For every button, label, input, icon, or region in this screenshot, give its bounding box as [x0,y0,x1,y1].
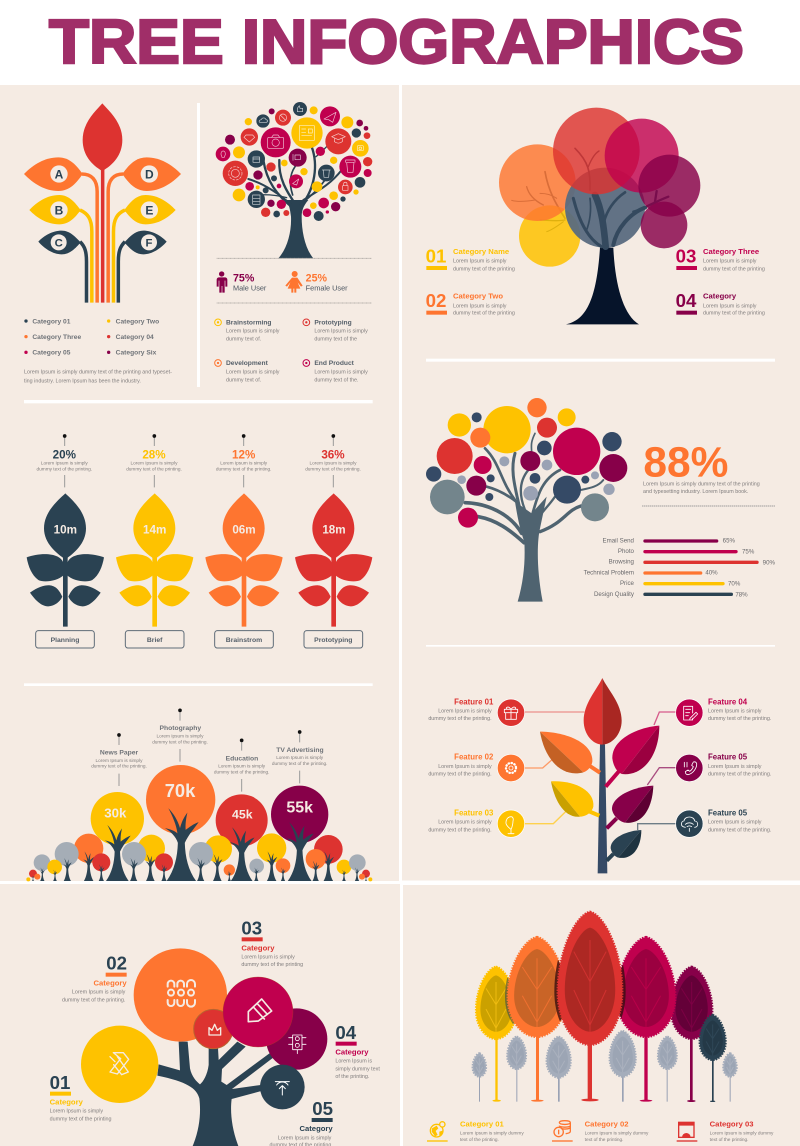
category 02: Category 02 [585,1119,629,1128]
legend: categories: Category Three [32,334,81,341]
icon: leaf D: D [145,167,154,181]
circle: red [553,108,640,194]
label 02: dummy text of the printing. [62,997,125,1003]
plant stem [598,744,607,873]
circle: red crown [194,1009,233,1049]
category 01: Lorem Ipsum is simply dummy [460,1130,524,1136]
leaf: dark [607,830,641,861]
label 03: 03 [241,918,262,939]
feature 03: dummy text of the printing. [428,827,492,833]
list item: brainstorming [215,319,280,343]
label 05 [269,1098,333,1146]
feature 04 [676,697,771,726]
panel: transparent circle tree [426,108,775,361]
chart: letter leaf stems [80,168,125,303]
plant: prototyping: dummy text of the printing. [305,467,361,473]
icon: leaf C: C [55,237,63,249]
list item: development: dummy text of. [226,377,261,383]
plant: prototyping [295,434,372,648]
legend: categories: Category Six [116,350,157,357]
plant: brainstrom: dummy text of the printing. [216,467,271,473]
tree circle: photography [146,765,215,881]
legend: categories: Category 01 [32,318,71,325]
feature 01: Lorem Ipsum is simply [438,709,492,715]
feature 02: dummy text of the printing. [428,772,492,778]
tree circle: tv advertising [271,786,328,881]
plant: planning: dummy text of the printing. [37,467,92,473]
icon: leaf B [29,195,81,224]
plant: brainstrom: 06m [232,523,256,536]
list item: development: Lorem Ipsum is simply [226,369,280,375]
plant: planning: Lorem Ipsum is simply [41,460,88,466]
legend: categories: Category 05 [32,350,71,357]
tree circle: education [216,794,268,881]
chart: bubble tree trunk [465,433,603,602]
small trees [26,833,372,881]
tree circle: tv advertising: 55k [286,800,313,817]
chart: left branches [512,172,565,232]
icon: male user [217,271,227,293]
label: category two [426,290,515,317]
plant: brainstrom: Lorem Ipsum is simply [220,460,268,466]
label: category two: Category Two [453,292,503,301]
list item: end product [303,360,368,383]
list item: development: Development [226,360,269,367]
label: category three: Lorem Ipsum is simply [703,259,757,265]
plant: planning [27,434,104,648]
circle: slate [565,168,645,248]
bar chart: Photo [618,548,635,555]
legend: categories [24,318,159,357]
icon: leaf D [122,157,181,191]
label: category three [676,245,765,272]
list item: end product: End Product [314,360,355,367]
feature 05 cloud [676,808,771,837]
label: category four: dummy text of the printing [703,311,765,317]
plant: prototyping: Lorem Ipsum is simply [310,460,357,466]
label 02: 02 [106,953,127,974]
label 05: Category [299,1124,333,1133]
panel: circle icon tree with numbered categories [50,918,380,1146]
connectors [525,712,676,830]
plant: brief [116,434,193,648]
plant: brainstrom: Brainstrom [226,637,262,644]
circle: yellow [519,205,580,267]
callout: tv advertising: dummy text of the printing. [272,761,327,767]
bar chart: 90% [763,559,776,566]
category 02: text of the printing. [585,1137,623,1143]
trunk [566,248,639,324]
plant: brief: Brief [147,637,163,644]
leaf tree: magenta [619,936,676,1038]
chart: center branches [573,148,668,247]
bar chart: 75% [742,548,755,555]
label 04 [335,1022,380,1080]
label: category name: dummy text of the printing [453,266,515,272]
stat: female user: Female User [306,283,348,292]
chart: bubble tree circles [426,398,627,528]
callout: photography: Lorem Ipsum is simply [157,733,204,739]
feature 03: Lorem Ipsum is simply [438,820,492,826]
label: category name: Category Name [453,247,509,256]
legend: categories: Category Two [116,318,159,325]
circle: magenta pencil [223,977,293,1047]
leaf tree: orange [506,936,562,1038]
callout: news paper: dummy text of the printing. [91,764,147,770]
callout: tv advertising [272,730,327,783]
circle: dark upload [260,1065,305,1109]
divider line [217,258,372,303]
plant: planning: Planning [51,637,79,644]
icon: leaf E [124,195,176,224]
leaf: plum [607,786,653,828]
leaf tree: dark [700,1015,726,1060]
leaf tree: red [558,912,622,1045]
callout: photography [152,708,208,762]
feature 02: Feature 02 [454,753,494,762]
icons: tree bubble glyphs [221,106,363,204]
feature 05 cloud: dummy text of the printing. [708,827,771,833]
bar chart: 65% [723,537,736,544]
tree circle: photography: 70k [165,780,196,801]
stat: female user [306,273,348,292]
icon: leaf C [38,231,81,254]
circle: magenta [605,119,679,193]
feature 05 phone: Feature 05 [708,753,748,762]
bar chart: 78% [735,591,748,598]
feature 02: Lorem Ipsum is simply [438,764,492,770]
callout: education [214,738,269,792]
category 03 [677,1119,774,1143]
plant: brief: Lorem Ipsum is simply [131,460,178,466]
list item: development [215,360,280,383]
label 04: simply dummy text [335,1066,380,1072]
stems [479,1035,731,1102]
label 05: Lorem Ipsum is simply [278,1135,332,1141]
callout: photography: dummy text of the printing. [152,739,208,745]
feature 01: dummy text of the printing. [428,716,492,722]
legend: categories: Category 04 [116,334,154,341]
circle: orange [499,144,576,221]
stat: 88 percent: 88% [643,439,728,487]
list item: prototyping: Lorem Ipsum is simply [314,329,368,335]
callout: tv advertising: TV Advertising [276,747,324,754]
feature 02 [428,753,525,782]
text: stat description: and typesetting industry. Lorem Ipsum book. [643,489,748,495]
chart: icon tree trunk and branches [248,142,342,258]
icon: female user [285,271,303,293]
label 03: Category [241,943,275,952]
panel: feature leaf plant [426,645,775,873]
category 03: text of the printing. [710,1137,748,1143]
stat: female user: 25% [306,273,328,285]
panel: leaf forest [427,912,774,1143]
title: TREE INFOGRAPHICS [49,8,744,77]
text: stat description [643,481,760,495]
label: category four [676,290,765,317]
label 02: Category [93,979,127,988]
category 03: Lorem Ipsum is simply dummy [710,1130,774,1136]
label: category four: Category [703,292,737,301]
list item: brainstorming: Brainstorming [226,320,271,327]
label: category three: dummy text of the printing [703,266,765,272]
label: category four: Lorem Ipsum is simply [703,303,757,309]
stat: male user [233,273,267,292]
label: category three: 03 [676,245,696,266]
label 01: Category [50,1098,84,1107]
icon: leaf F: F [146,237,153,249]
bar chart [584,537,776,598]
label: category name [426,245,515,272]
label 01 [50,1072,112,1122]
category 03: Category 03 [710,1119,754,1128]
tree circle: news paper [91,792,144,881]
icon: leaf A: A [55,167,64,181]
callout: tv advertising: Lorem Ipsum is simply [276,755,324,761]
label: category two: Lorem Ipsum is simply [453,303,507,309]
leaf tree: yellow [474,966,514,1040]
bar chart: 40% [705,570,718,577]
tree circle: news paper: 30k [104,805,127,820]
label 03: Lorem Ipsum is simply [241,954,295,960]
category 01: text of the printing. [460,1137,499,1143]
circle: plum [638,155,700,217]
panel: bubble tree with 88 percent and bars [426,360,776,602]
text: stat description: Lorem Ipsum is simply dummy text of the printing [643,481,760,487]
icon: leaf A [24,157,83,191]
label 05: 05 [312,1098,333,1119]
feature 04: Lorem Ipsum is simply [708,709,762,715]
circle: plum traffic light [266,1008,327,1070]
bar chart: Price [620,580,635,587]
list item: end product: dummy text of the. [314,377,359,383]
plant: prototyping: 18m [322,523,346,536]
list item: prototyping: Prototyping [314,320,352,327]
label 01: dummy text of the printing [50,1116,112,1122]
label: category two: dummy text of the printing [453,311,515,317]
feature 03: Feature 03 [454,808,494,817]
text: description: ting industry. Lorem Ipsum has been the industry. [24,378,141,384]
tree trunk and branches [157,1042,277,1146]
circle: orange pattern [134,948,227,1042]
plant: prototyping: 36% [321,448,345,461]
icon: leaf E: E [145,203,153,217]
label 03 [241,918,303,968]
panel: forest of round trees [24,683,373,881]
label: category two: 02 [426,290,446,311]
chart: icon tree bubbles [216,102,372,221]
callout: news paper: News Paper [100,750,139,757]
list item: end product: Lorem Ipsum is simply [314,369,368,375]
leaf: red top [584,678,622,745]
stat: male user: 75% [233,273,255,285]
category 02 [552,1119,649,1143]
label 02: Lorem Ipsum is simply [72,990,126,996]
plant: brief: 14m [143,523,166,536]
label: category four: 04 [676,290,697,311]
panel: four plant progress [24,400,373,648]
feature 01 [428,697,525,726]
label 01: 01 [50,1072,70,1093]
icon: top red leaf [83,103,122,171]
callout: news paper: Lorem Ipsum is simply [96,758,143,764]
plant: planning: 10m [54,523,77,536]
list item: prototyping [303,319,368,343]
panel: letter leaf tree and icon tree [24,102,372,387]
plant: brief: dummy text of the printing. [126,467,182,473]
circle: yellow ribbon [81,1026,158,1103]
leaf: yellow [551,781,599,817]
plant: brief: 28% [142,448,166,461]
feature 05 phone [676,753,771,782]
callout: education: Lorem Ipsum is simply [218,763,266,769]
feature 04: Feature 04 [708,697,748,706]
label: category name: 01 [426,245,446,266]
callout: education: dummy text of the printing. [214,769,269,775]
stat: male user: Male User [233,283,267,292]
label 04: of the printing. [335,1074,369,1080]
category 02: Lorem Ipsum is simply dummy [585,1130,649,1136]
feature 04: dummy text of the printing. [708,716,771,722]
label: category name: Lorem Ipsum is simply [453,259,507,265]
label 02 [62,953,127,1003]
tree circle: education: 45k [232,808,253,822]
label: category three: Category Three [703,247,759,256]
bar chart: Design Quality [594,591,635,598]
label 04: 04 [335,1022,357,1043]
label 03: dummy text of the printing [241,962,303,968]
leaf tree: plum [671,967,712,1039]
category 01: Category 01 [460,1119,505,1128]
list item: prototyping: dummy text of the [314,337,357,343]
circle: plum small [641,202,687,248]
callout: photography: Photography [160,725,201,732]
feature 03 [428,808,525,837]
icon: leaf F [124,231,167,254]
label 01: Lorem Ipsum is simply [50,1109,103,1115]
gray small leaves [473,1031,737,1078]
feature 05 cloud: Lorem Ipsum is simply [708,820,762,826]
bar chart: Technical Problem [584,569,634,576]
callout: education: Education [226,755,258,762]
icon: leaf B: B [55,203,64,217]
leaf: magenta [606,726,659,787]
label 04: Category [335,1048,369,1057]
text: description: Lorem Ipsum is simply dummy text of the printing and typeset- [24,370,172,376]
bar chart: 70% [728,580,741,587]
feature 05 phone: Lorem Ipsum is simply [708,764,762,770]
list item: brainstorming: Lorem Ipsum is simply [226,329,280,335]
category 01 [427,1119,524,1143]
list item: brainstorming: dummy text of. [226,337,261,343]
feature 05 cloud: Feature 05 [708,808,748,817]
bar chart: Email Send [603,537,635,544]
callout: news paper [91,733,147,786]
label 04: Lorem Ipsum is [335,1058,372,1064]
leaf: orange [540,732,600,773]
plant: brainstrom [205,434,283,648]
plant: prototyping: Prototyping [314,637,352,644]
feature 05 phone: dummy text of the printing. [708,772,771,778]
plant: brainstrom: 12% [232,448,256,461]
feature 01: Feature 01 [454,697,494,706]
plant: planning: 20% [53,448,77,461]
text: description [24,370,172,384]
bar chart: Browsing [609,559,635,566]
